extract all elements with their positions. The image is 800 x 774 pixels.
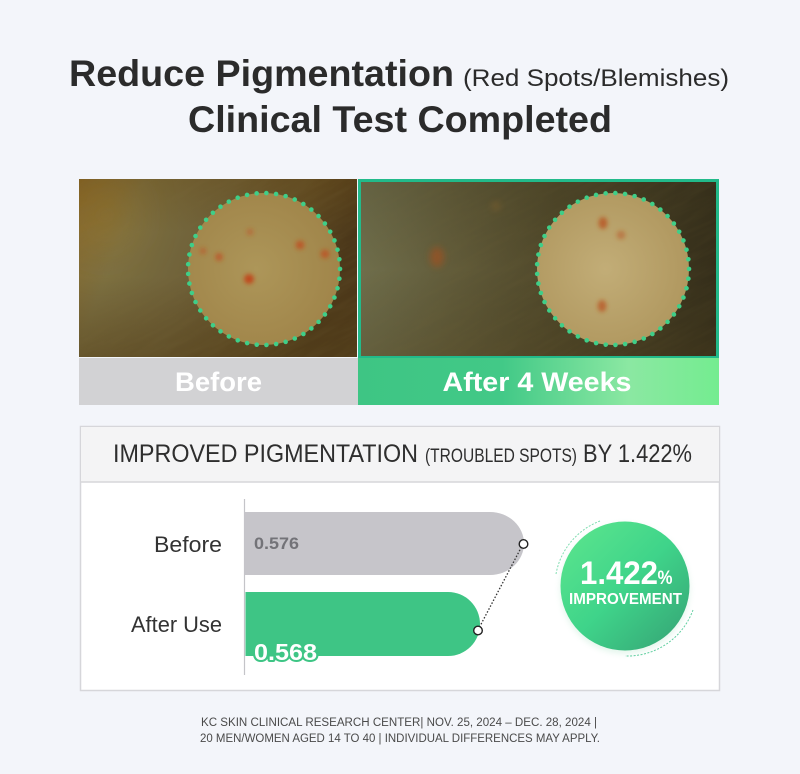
axis line	[244, 499, 246, 675]
improvement badge: 1.422	[580, 555, 658, 591]
improvement badge: %	[658, 568, 673, 589]
row label: before: Before	[154, 532, 222, 557]
footnote: 20 MEN/WOMEN AGED 14 TO 40 | INDIVIDUAL DIFFERENCES MAY APPLY.	[200, 733, 600, 745]
title: Clinical Test Completed	[188, 99, 612, 140]
footnote: KC SKIN CLINICAL RESEARCH CENTER| NOV. 25, 2024 – DEC. 28, 2024 |	[201, 717, 597, 729]
title: (Red Spots/Blemishes)	[463, 65, 729, 92]
bar: after use: 0.568	[254, 639, 317, 665]
panel: improvement chart	[80, 426, 720, 690]
chart heading: BY 1.422%	[583, 440, 692, 468]
caption: before: Before	[175, 367, 262, 397]
footnote	[200, 717, 600, 745]
chart heading: IMPROVED PIGMENTATION	[113, 440, 418, 468]
caption: after 4 weeks	[358, 358, 719, 405]
bar: before	[244, 512, 524, 575]
bar: after use	[246, 592, 480, 665]
chart heading: (TROUBLED SPOTS)	[425, 446, 577, 467]
green frame	[360, 180, 718, 358]
chart heading	[81, 427, 719, 482]
improvement badge	[556, 521, 693, 656]
bar: before: 0.576	[254, 534, 299, 553]
caption: before	[79, 358, 358, 405]
row label: after use: After Use	[131, 612, 222, 637]
panel: after photo	[358, 179, 719, 358]
title: Reduce Pigmentation	[69, 53, 454, 94]
magnified circle: after	[537, 193, 689, 345]
panel: before photo	[79, 179, 357, 357]
magnified circle: before	[188, 193, 340, 345]
caption: after 4 weeks: After 4 Weeks	[442, 367, 632, 397]
title	[69, 53, 729, 140]
improvement badge: IMPROVEMENT	[569, 591, 683, 608]
connector between bars	[474, 540, 528, 635]
